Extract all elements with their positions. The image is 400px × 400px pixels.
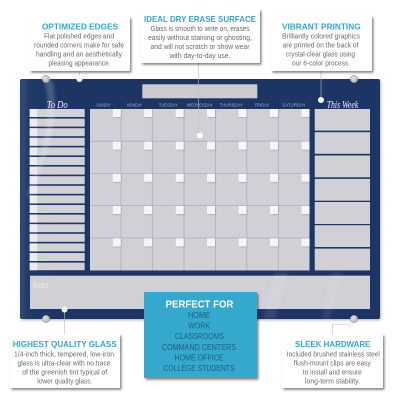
glass reflections xyxy=(20,79,343,319)
heading: OPTIMIZED EDGES xyxy=(42,22,118,32)
audience list: COLLEGE STUDENTS xyxy=(164,363,235,373)
audience list: HOME xyxy=(188,310,210,320)
audience list: WORK xyxy=(188,321,210,331)
body text: 1/4-inch thick, tempered, low-iron xyxy=(14,352,114,358)
weekday labels: MONDAY xyxy=(127,103,142,108)
clip: bottom right xyxy=(350,315,358,323)
body text: pleasing appearance. xyxy=(48,60,111,68)
panel: perfect for xyxy=(144,292,257,378)
body text: handling and an aesthetically xyxy=(36,52,122,58)
body text: easily without staining or ghosting, xyxy=(148,35,252,42)
marker dot: edges xyxy=(76,76,82,82)
marker dot: printing xyxy=(318,97,324,103)
marker dot: surface xyxy=(197,132,203,138)
audience list: CLASSROOMS xyxy=(175,331,224,341)
body text xyxy=(287,352,380,386)
notes field xyxy=(30,276,370,309)
body text xyxy=(148,26,252,60)
body text: crystal-clear glass using xyxy=(286,52,355,58)
audience list: COMMAND CENTERS xyxy=(162,342,236,352)
body text: Flat polished edges and xyxy=(44,34,114,40)
clip: top right xyxy=(350,75,358,83)
to do list xyxy=(30,109,85,270)
weekday labels: SATURDAY xyxy=(282,103,306,108)
callout: highest quality glass xyxy=(10,334,120,388)
body text: Included brushed stainless steel xyxy=(287,352,380,358)
weekday labels: SUNDAY xyxy=(96,103,111,108)
body text: lower quality glass. xyxy=(37,378,92,386)
body text: Glass is smooth to write on, erases xyxy=(150,26,250,33)
body text xyxy=(14,352,114,386)
calendar grid xyxy=(90,109,310,270)
this week list xyxy=(315,109,370,270)
weekday labels: TUESDAY xyxy=(159,103,178,108)
callout: ideal dry erase surface xyxy=(141,9,260,63)
this week heading: This Week xyxy=(327,100,359,111)
clip: bottom left xyxy=(42,315,50,323)
weekday labels: WEDNESDAY xyxy=(187,103,213,108)
to do heading: To Do xyxy=(47,100,68,111)
heading: HIGHEST QUALITY GLASS xyxy=(13,339,117,349)
callout: vibrant printing xyxy=(271,16,372,71)
heading: PERFECT FOR xyxy=(166,300,234,310)
audience list xyxy=(162,310,236,373)
body text: and will not scratch or show wear xyxy=(150,44,250,51)
body text: with day-to-day use. xyxy=(169,53,231,60)
marker dot: hardware xyxy=(347,322,353,328)
body text: are printed on the back of xyxy=(282,42,359,50)
weekday labels xyxy=(96,103,306,108)
weekday labels: FRIDAY xyxy=(255,103,269,108)
notes heading: Notes xyxy=(32,280,48,291)
body text: glass is ultra-clear with no trace xyxy=(18,360,111,368)
glass board xyxy=(20,79,380,319)
callout: sleek hardware xyxy=(282,334,383,388)
audience list: HOME OFFICE xyxy=(174,352,224,362)
clip: top left xyxy=(42,75,50,83)
body text: our 6-color process. xyxy=(292,60,350,68)
body text: to install and ensure xyxy=(303,370,362,376)
body text xyxy=(34,34,124,68)
body text xyxy=(282,34,360,68)
heading: IDEAL DRY ERASE SURFACE xyxy=(144,14,256,24)
body text: flush-mount clips are easy xyxy=(294,360,371,368)
body text: rounded corners make for safe xyxy=(34,42,124,50)
body text: of the greenish tint typical of xyxy=(22,370,107,376)
body text: long-term stability. xyxy=(305,378,360,386)
leader lines xyxy=(64,63,350,334)
board background xyxy=(20,79,380,319)
month title field xyxy=(142,84,257,98)
heading: SLEEK HARDWARE xyxy=(295,339,371,349)
marker dot: glass xyxy=(62,306,68,312)
callout: optimized edges xyxy=(30,16,130,71)
body text: Brilliantly colored graphics xyxy=(282,34,360,40)
heading: VIBRANT PRINTING xyxy=(282,22,361,32)
weekday labels: THURSDAY xyxy=(220,103,243,108)
